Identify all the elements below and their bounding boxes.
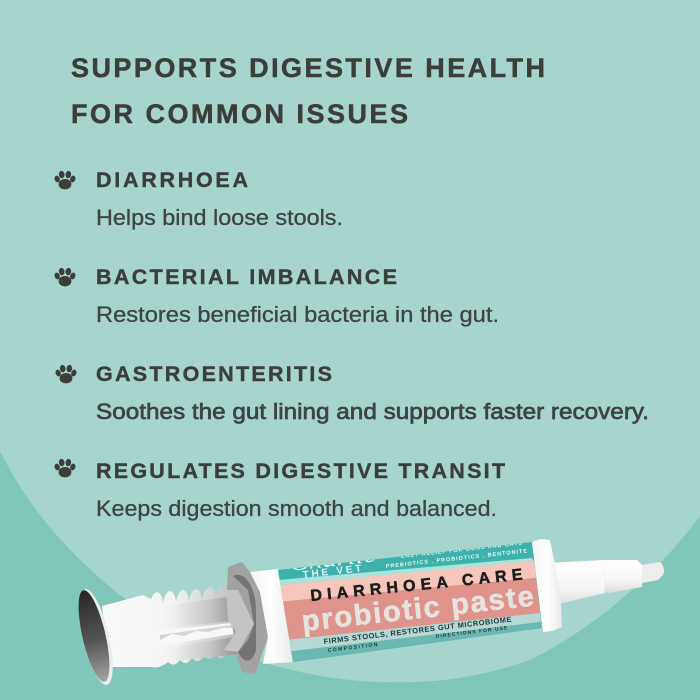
nozzle [548,560,605,606]
product type: probiotic paste [300,581,535,638]
title: SUPPORTS DIGESTIVE HEALTH [71,53,545,83]
top claim: EASY RELIEF FOR DOGS AND CATS [401,541,523,560]
flange [227,562,268,674]
item: diarrhoea: DIARRHOEA [96,168,248,192]
item: gastroenteritis: GASTROENTERITIS [96,362,332,386]
item: bacterial imbalance [54,265,499,327]
flange opening [233,575,256,661]
barrel inner fin [224,590,254,652]
icon: paw print [54,268,76,286]
plunger [102,586,256,667]
item: gastroenteritis [55,362,649,424]
item: gastroenteritis: Soothes the gut lining and supports faster recovery. [96,399,649,424]
claim: FIRMS STOOLS, RESTORES GUT MICROBIOME [323,615,512,646]
nozzle step [603,560,642,593]
directions label: DIRECTIONS FOR USE [436,625,508,640]
item: diarrhoea: Helps bind loose stools. [96,205,343,230]
title: FOR COMMON ISSUES [71,99,408,129]
item: diarrhoea [54,168,343,230]
icon: paw print [55,365,77,383]
icon: paw print [54,171,76,189]
collar right [532,539,562,632]
label [278,542,542,662]
item: regulates digestive transit: Keeps digestion smooth and balanced. [96,496,497,521]
collar left [250,569,294,664]
ingredients: PREBIOTICS . PROBIOTICS . BENTONITE [386,548,528,570]
brand subtitle: THE VET [302,563,362,581]
plunger disc interior [72,588,116,684]
plunger disc [72,586,120,688]
item: bacterial imbalance: Restores beneficial bacteria in the gut. [96,302,499,327]
nozzle tip [642,562,664,583]
syringe product [72,530,664,688]
product name: DIARRHOEA CARE [310,567,524,605]
item: regulates digestive transit: REGULATES DIGESTIVE TRANSIT [96,459,505,483]
item: bacterial imbalance: BACTERIAL IMBALANCE [96,265,397,289]
title [71,53,545,129]
icon: paw print [54,459,76,477]
composition label: COMPOSITION [328,642,378,654]
brand name: Charlie [287,538,377,577]
item: regulates digestive transit [54,459,505,521]
